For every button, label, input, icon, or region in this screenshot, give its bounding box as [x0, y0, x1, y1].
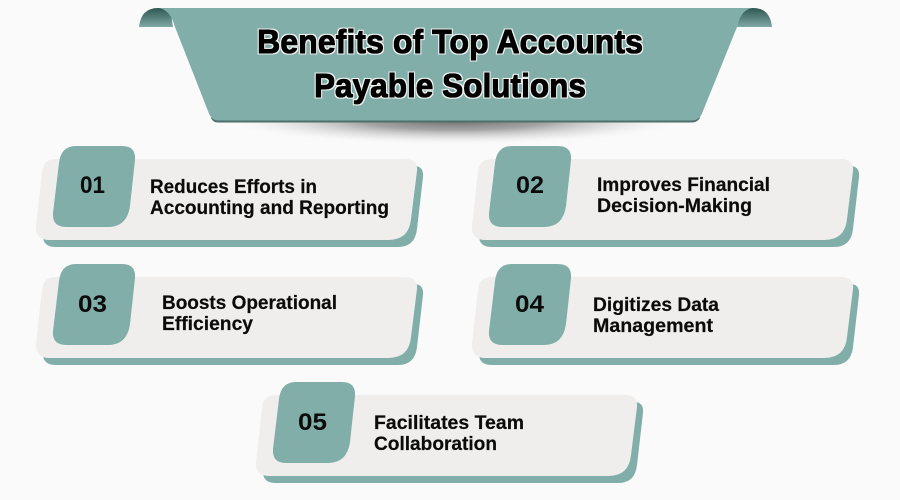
card 05: team collaboration: Collaboration	[374, 434, 497, 455]
card 01: reduces efforts: Reduces Efforts in	[150, 177, 317, 198]
card 04: data management: Management	[593, 316, 714, 337]
card 04: data management	[472, 264, 859, 365]
title banner	[139, 8, 772, 122]
bottom edge	[211, 116, 700, 122]
title: Payable Solutions	[314, 67, 586, 104]
card 02: financial decisions: Improves Financial	[597, 175, 770, 196]
card 04: data management: Digitizes Data	[593, 295, 719, 316]
card 05: team collaboration	[256, 382, 643, 483]
card 02: financial decisions: 02	[516, 172, 544, 199]
ribbon	[158, 8, 753, 120]
card 03: operational efficiency: Efficiency	[162, 314, 253, 335]
right curl	[737, 8, 772, 27]
title	[257, 23, 643, 104]
card 05: team collaboration: Facilitates Team	[374, 413, 524, 434]
card 01: reduces efforts	[36, 146, 423, 247]
title: Benefits of Top Accounts	[257, 23, 643, 60]
card 03: operational efficiency	[36, 264, 423, 365]
card 02: financial decisions: Decision-Making	[597, 196, 752, 217]
left curl	[139, 8, 173, 27]
banner shadow	[220, 120, 690, 146]
card 01: reduces efforts: Accounting and Reporting	[150, 198, 389, 219]
card 02: financial decisions	[472, 146, 859, 247]
card 04: data management: 04	[515, 291, 545, 318]
card 03: operational efficiency: 03	[78, 291, 107, 318]
card 03: operational efficiency: Boosts Operational	[162, 293, 337, 314]
card 05: team collaboration: 05	[298, 409, 327, 436]
card 01: reduces efforts: 01	[80, 172, 105, 199]
